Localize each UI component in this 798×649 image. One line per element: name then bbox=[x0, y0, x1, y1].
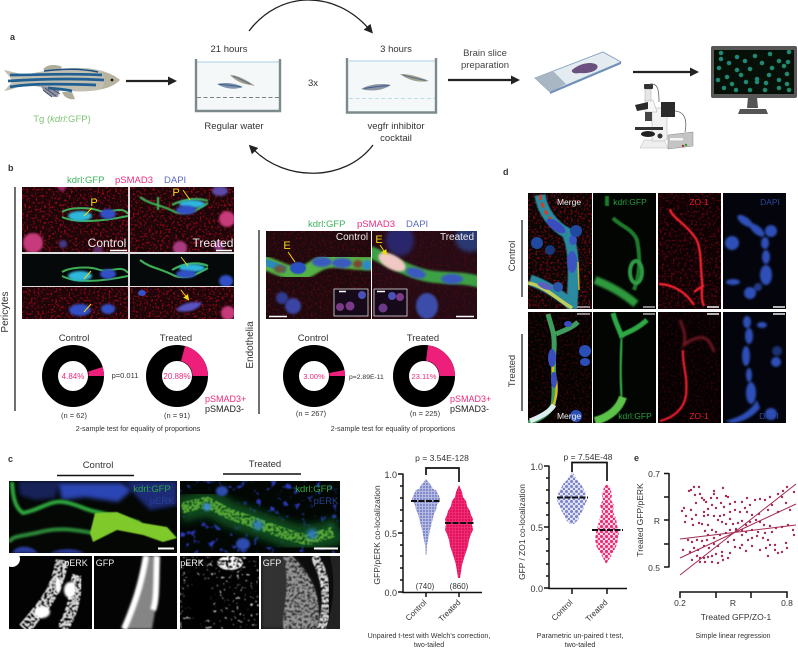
image annotations: Control bbox=[88, 236, 126, 250]
mean line: control bbox=[557, 496, 588, 498]
label: brain slice preparation: Brain slice bbox=[463, 48, 507, 59]
icon: regular water tank bbox=[196, 59, 280, 111]
image: control merge: pERK bbox=[150, 496, 175, 507]
scatter points bbox=[682, 487, 794, 563]
icon: vegfr inhibitor tank bbox=[347, 58, 436, 112]
label: 3 hours: 3 hours bbox=[380, 44, 412, 55]
image: control kdrl:GFP: kdrl:GFP bbox=[613, 197, 647, 207]
caption: test: 2-sample test for equality of proportions bbox=[76, 425, 201, 433]
panel label b: b bbox=[8, 163, 14, 173]
heading rule: control bbox=[57, 474, 134, 476]
counts: (740) bbox=[416, 582, 435, 591]
legend: pSMAD3 status: pSMAD3+ bbox=[450, 394, 491, 404]
y axis title: GFP/pERK co-localization bbox=[372, 485, 382, 585]
axes bbox=[398, 474, 482, 597]
image: control GFP: GFP bbox=[96, 558, 114, 568]
panel c: pERK micrographs bbox=[4, 454, 340, 629]
icon: microscope bbox=[635, 84, 693, 149]
label: 21 hours: 21 hours bbox=[211, 44, 248, 55]
image: control GFP bbox=[94, 556, 177, 629]
image: endothelia treated: Treated bbox=[440, 232, 474, 243]
image: control DAPI: DAPI bbox=[760, 197, 780, 207]
label: n treated: (n = 91) bbox=[164, 411, 191, 420]
y tick labels: 0.5 bbox=[384, 529, 397, 539]
y tick labels: 0.7 bbox=[648, 469, 660, 479]
donut: endothelia control 3.00%: 3.00% bbox=[303, 372, 325, 381]
donut: pericytes treated 20.88% bbox=[154, 346, 208, 399]
label: control: Control bbox=[507, 241, 518, 271]
x label treated: Treated bbox=[437, 598, 462, 624]
label: p value: p=0.011 bbox=[112, 371, 138, 380]
image: control merge bbox=[22, 187, 128, 252]
chart: GFP/ZO1 co-localization bbox=[517, 452, 627, 649]
image: treated merge bbox=[180, 481, 340, 553]
x label treated: Treated bbox=[584, 598, 609, 624]
image: treated pSMAD3/DAPI row bbox=[130, 287, 234, 319]
arrow: top cycle bbox=[249, 0, 369, 31]
legend: pSMAD3 status: pSMAD3+ bbox=[205, 394, 246, 404]
image: treated DAPI: DAPI bbox=[759, 411, 779, 421]
swarm: treated bbox=[445, 485, 473, 578]
caption: Parametric un-paired t test, bbox=[537, 631, 623, 640]
label: p value: p=2.89E-11 bbox=[349, 374, 384, 381]
label: treated: Treated bbox=[507, 355, 518, 387]
mean line: treated bbox=[592, 529, 623, 531]
image: treated kdrl:GFP: kdrl:GFP bbox=[618, 411, 652, 421]
legend: endothelia stains: pSMAD3 bbox=[357, 219, 395, 230]
image annotations: E bbox=[283, 240, 291, 252]
label: endothelia: Endothelia bbox=[245, 321, 256, 369]
regression lines bbox=[680, 484, 796, 575]
image: control merge: kdrl:GFP bbox=[133, 484, 171, 495]
image: control pERK bbox=[9, 556, 92, 629]
label: treated pie title: Treated bbox=[160, 333, 192, 344]
icon: zebrafish bbox=[4, 65, 120, 99]
y axis title: Treated GFP/pERK bbox=[635, 483, 645, 557]
significance bracket bbox=[572, 462, 607, 481]
x label control: Control bbox=[550, 598, 575, 623]
y tick labels: 1.0 bbox=[530, 462, 543, 472]
y tick labels: 0.0 bbox=[384, 588, 397, 598]
arrow: slice to monitor bbox=[633, 71, 693, 73]
panel b: endothelia bbox=[245, 219, 491, 433]
donut: pericytes control 4.84%: 4.84% bbox=[62, 372, 84, 381]
heading: treated: Treated bbox=[249, 459, 281, 470]
label: regular water: Regular water bbox=[204, 121, 264, 132]
bracket: control bbox=[521, 220, 523, 297]
image annotations bbox=[84, 187, 233, 312]
image: treated merge bbox=[130, 187, 234, 252]
p value: p = 3.54E-128 bbox=[415, 453, 469, 463]
label: pericytes: Pericytes bbox=[0, 291, 11, 333]
image: treated DAPI bbox=[723, 312, 786, 423]
image: endothelia treated bbox=[372, 231, 477, 319]
panel a: experimental workflow bbox=[4, 0, 797, 173]
image: control DAPI bbox=[723, 193, 786, 309]
image: control merge bbox=[528, 193, 592, 309]
donut: endothelia treated 23.11% bbox=[401, 345, 455, 399]
image: control kdrl:GFP bbox=[593, 193, 656, 309]
icon: computer monitor with cells bbox=[711, 46, 797, 114]
x tick labels: R bbox=[730, 598, 736, 608]
panel d: ZO-1 micrographs bbox=[503, 167, 786, 423]
donut: endothelia control 3.00% bbox=[291, 353, 345, 399]
image: control pERK: pERK bbox=[64, 558, 88, 568]
y tick labels: 0.5 bbox=[530, 523, 543, 533]
mean line: treated bbox=[445, 522, 475, 524]
caption: two-tailed bbox=[565, 640, 595, 649]
label: vegfr inhibitor cocktail: vegfr inhibitor bbox=[367, 121, 425, 132]
swarm: control bbox=[557, 472, 587, 524]
y tick labels: R bbox=[654, 516, 660, 526]
donut: endothelia treated 23.11%: 23.11% bbox=[412, 372, 437, 381]
label: control pie title: Control bbox=[298, 333, 328, 344]
caption: Tg kdrl:GFP: Tg (kdrl:GFP) bbox=[33, 114, 91, 125]
legend: pericytes stains: pSMAD3 bbox=[115, 175, 153, 186]
label: 3x: 3x bbox=[308, 78, 318, 89]
micrographs: endothelia bbox=[262, 224, 485, 319]
panel label e: e bbox=[634, 453, 639, 463]
image annotations: Treated bbox=[193, 236, 233, 250]
image: treated GFP bbox=[261, 556, 340, 629]
image: treated pERK: pERK bbox=[180, 558, 204, 568]
legend: pericytes stains: DAPI bbox=[164, 175, 186, 186]
image: control pSMAD3/DAPI row bbox=[22, 287, 128, 319]
heading: control: Control bbox=[83, 460, 113, 471]
image: treated pERK bbox=[180, 556, 259, 629]
arrow: tank to slice bbox=[448, 79, 514, 81]
label: control pie title: Control bbox=[59, 333, 89, 344]
panel e: regression scatter bbox=[634, 453, 796, 640]
caption: two-tailed bbox=[414, 641, 444, 649]
p value: p = 7.54E-48 bbox=[564, 452, 613, 462]
image: control merge bbox=[9, 481, 177, 553]
x tick labels: 0.2 bbox=[674, 598, 686, 608]
caption: Simple linear regression bbox=[695, 633, 771, 640]
image: treated merge: pERK bbox=[314, 496, 339, 507]
bracket: treated bbox=[521, 334, 523, 411]
y tick labels: 0.5 bbox=[648, 563, 660, 573]
micrographs: pericytes control and treated bbox=[22, 183, 235, 320]
legend: endothelia stains: kdrl:GFP bbox=[308, 219, 345, 230]
image: treated merge bbox=[528, 312, 592, 423]
image: control ZO-1 bbox=[658, 193, 721, 309]
image: treated ZO-1: ZO-1 bbox=[689, 411, 709, 421]
legend: pSMAD3 status: pSMAD3- bbox=[450, 404, 489, 414]
label: n treated: (n = 225) bbox=[410, 409, 441, 418]
x axis bbox=[680, 592, 787, 598]
donut: pericytes control 4.84% bbox=[50, 353, 104, 399]
caption: Unpaired t-test with Welch's correction, bbox=[368, 632, 490, 640]
significance bracket bbox=[426, 468, 459, 482]
arrow: bottom cycle bbox=[253, 145, 373, 173]
heading rule: treated bbox=[223, 473, 301, 475]
image: control ZO-1: ZO-1 bbox=[689, 197, 709, 207]
bracket: endothelia bbox=[258, 230, 260, 414]
legend: endothelia stains: DAPI bbox=[406, 219, 428, 230]
image: treated merge: Merge bbox=[557, 411, 581, 421]
image: treated ZO-1 bbox=[658, 312, 721, 423]
image: control merge: Merge bbox=[557, 197, 581, 207]
image: treated kdrl:GFP bbox=[593, 312, 656, 423]
image: treated merge: kdrl:GFP bbox=[295, 484, 333, 495]
panel label d: d bbox=[503, 167, 508, 177]
label: brain slice preparation: preparation bbox=[461, 60, 509, 71]
panel label a: a bbox=[10, 32, 16, 42]
caption: test: 2-sample test for equality of proportions bbox=[331, 425, 456, 433]
image annotations: P bbox=[90, 197, 98, 209]
x tick labels: 0.8 bbox=[781, 598, 793, 608]
label: treated pie title: Treated bbox=[407, 333, 439, 344]
image annotations: E bbox=[375, 234, 383, 246]
image annotations: P bbox=[172, 187, 180, 199]
image: control GFP/DAPI row bbox=[22, 254, 128, 286]
swarm: treated bbox=[595, 484, 619, 564]
image: endothelia control: Control bbox=[336, 232, 368, 243]
label: n control: (n = 62) bbox=[61, 411, 88, 420]
label: vegfr inhibitor cocktail: cocktail bbox=[380, 133, 412, 144]
image: treated GFP/DAPI row bbox=[130, 254, 234, 286]
y axis title: GFP / ZO1 co-localization bbox=[517, 484, 527, 580]
image annotations bbox=[283, 234, 386, 262]
chart: GFP/pERK co-localization bbox=[368, 453, 490, 649]
arrow: fish to tank bbox=[126, 80, 171, 82]
panel label c: c bbox=[8, 454, 13, 464]
image: endothelia control bbox=[266, 231, 371, 319]
y axis bbox=[664, 473, 669, 568]
legend: pericytes stains: kdrl:GFP bbox=[67, 175, 104, 186]
counts: (860) bbox=[450, 582, 469, 591]
x label control: Control bbox=[404, 598, 429, 623]
axes bbox=[544, 466, 627, 594]
panel b: pericytes bbox=[0, 163, 246, 433]
x axis title: Treated GFP/ZO-1 bbox=[701, 612, 772, 622]
mean line: control bbox=[411, 500, 441, 502]
y tick labels: 0.0 bbox=[530, 584, 543, 594]
donut: pericytes treated 20.88%: 20.88% bbox=[163, 372, 191, 381]
bracket: pericytes bbox=[14, 187, 16, 411]
icon: glass slide with brain slice bbox=[535, 52, 621, 94]
swarm: control bbox=[412, 479, 440, 555]
image: treated GFP: GFP bbox=[263, 558, 281, 568]
y tick labels: 1.0 bbox=[384, 470, 397, 480]
label: n control: (n = 267) bbox=[296, 409, 327, 418]
legend: pSMAD3 status: pSMAD3- bbox=[205, 404, 244, 414]
